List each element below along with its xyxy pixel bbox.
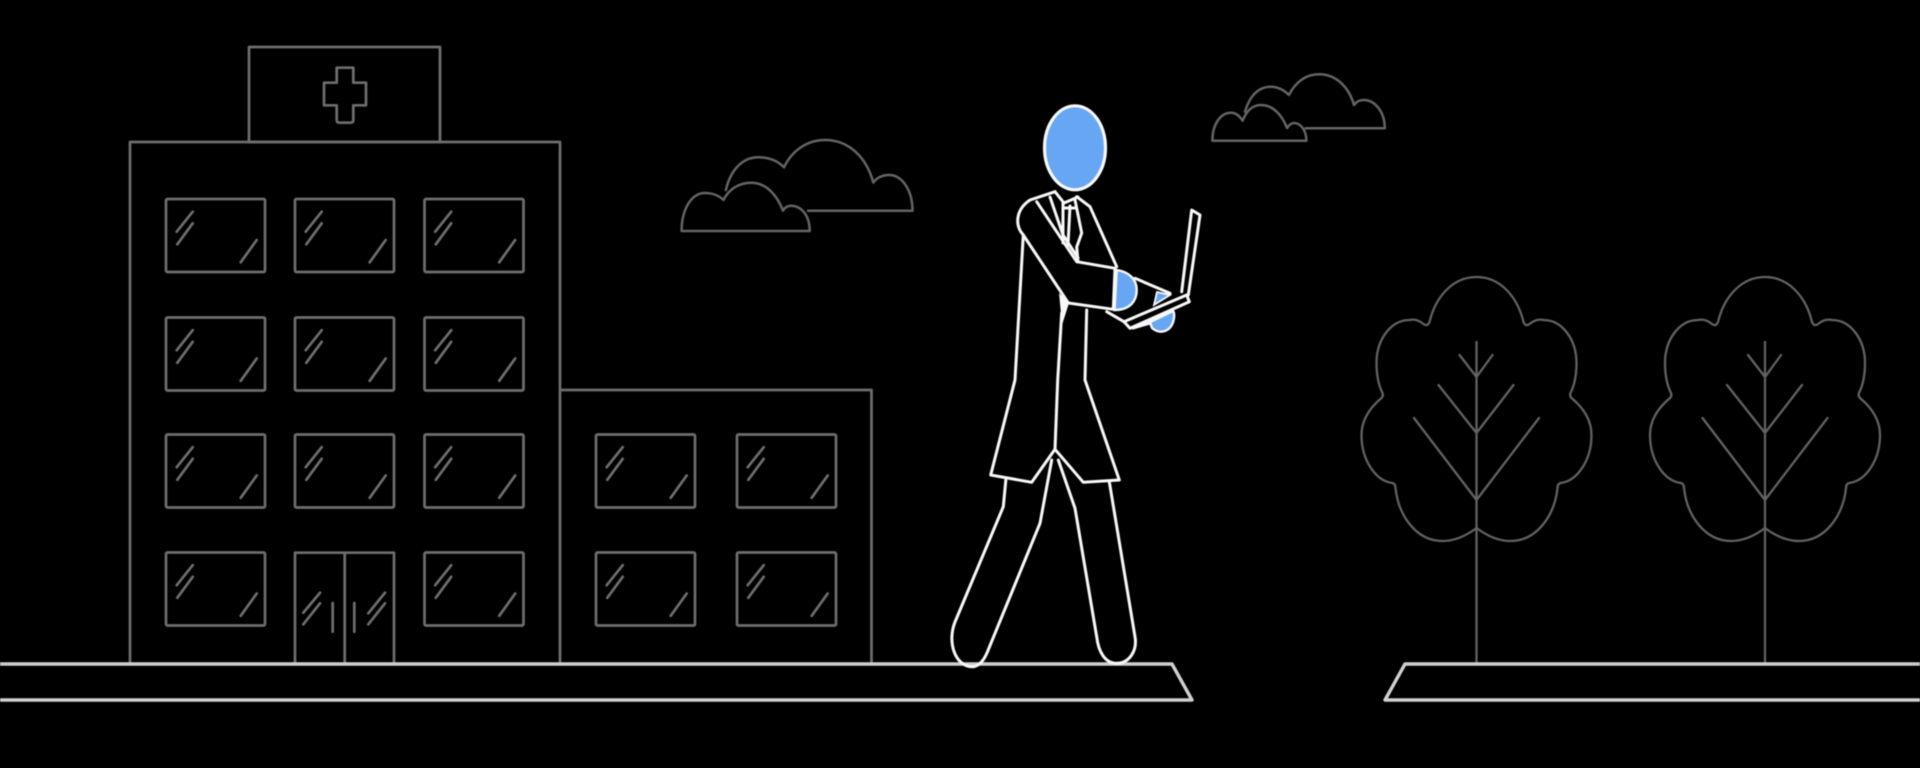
trees — [1362, 277, 1880, 662]
upper right cloud — [1212, 74, 1385, 141]
far hand — [1150, 292, 1174, 332]
laptop — [1107, 210, 1200, 328]
ground platform left — [0, 664, 1192, 700]
near arm — [1018, 192, 1115, 309]
tower windows — [166, 199, 524, 626]
person: doctor walking with laptop — [952, 106, 1200, 667]
main tower outline — [130, 142, 560, 662]
annex wing outline — [560, 390, 872, 662]
rooftop sign with medical cross — [249, 47, 440, 142]
ground platform right — [1385, 664, 1920, 700]
tree 2 — [1650, 277, 1880, 662]
left leg — [952, 460, 1052, 667]
left cloud — [682, 140, 912, 231]
right leg — [1058, 460, 1135, 663]
entrance double door — [295, 553, 394, 662]
tree 1 — [1362, 277, 1592, 662]
annex windows — [596, 434, 836, 626]
far arm — [1077, 197, 1170, 293]
icon: medical cross — [324, 68, 366, 123]
near hand — [1114, 270, 1137, 310]
collar, lapels and tie — [1050, 192, 1082, 262]
head — [1044, 106, 1106, 190]
coat body — [991, 235, 1119, 482]
hospital building — [130, 47, 872, 662]
